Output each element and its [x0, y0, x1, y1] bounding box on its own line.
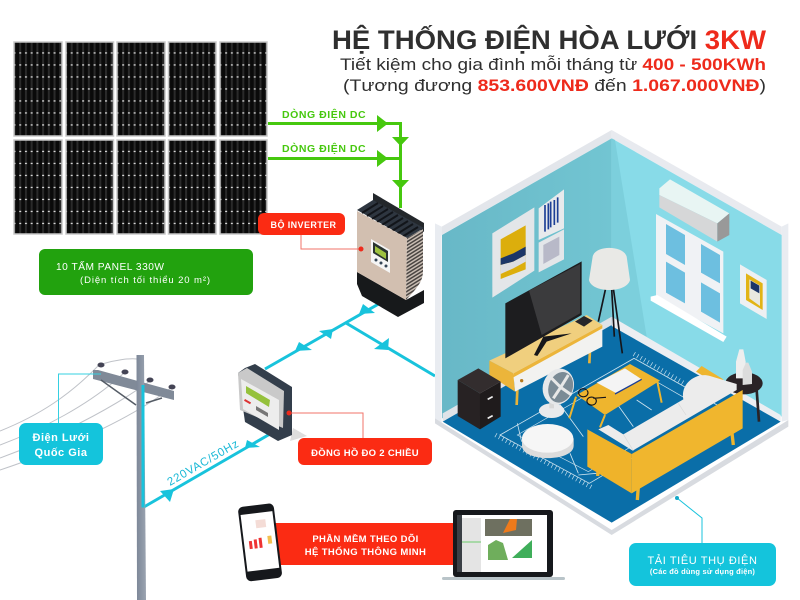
side table [725, 349, 763, 422]
voltage label: 220VAC/50Hz [166, 438, 241, 489]
lamp [589, 248, 630, 353]
panel caption: (Diện tích tối thiểu 20 m²) [80, 275, 211, 286]
software banner: HỆ THỐNG THÔNG MINH [305, 546, 426, 558]
software banner [275, 523, 455, 565]
sofa [587, 366, 743, 500]
DC wiring arrows: DÒNG ĐIỆN DC [282, 142, 366, 155]
inverter label [258, 213, 364, 252]
floor [435, 418, 788, 535]
room caption [629, 496, 776, 586]
room caption: TẢI TIÊU THỤ ĐIỆN [647, 554, 758, 567]
blue stripes art [539, 189, 564, 240]
grid label [19, 374, 103, 465]
panel caption: 10 TẤM PANEL 330W [56, 260, 165, 273]
tv [505, 261, 593, 358]
pouf [522, 424, 574, 458]
solar panels array [13, 41, 268, 236]
DC wiring arrows: DÒNG ĐIỆN DC [282, 108, 366, 121]
living room furniture [458, 261, 763, 500]
grid label: Quốc Gia [35, 447, 88, 459]
meter label [286, 410, 432, 465]
laptop [442, 510, 565, 580]
right wall [612, 138, 782, 417]
outer walls [435, 120, 788, 530]
inverter label: BỘ INVERTER [271, 219, 337, 230]
utility pole [0, 355, 176, 600]
title: HỆ THỐNG ĐIỆN HÒA LƯỚI 3KW [332, 23, 767, 55]
window [651, 214, 727, 342]
meter label: ĐỒNG HỒ ĐO 2 CHIỀU [311, 447, 419, 459]
software banner: PHẦN MỀM THEO DÕI [312, 534, 419, 545]
large wall art [492, 207, 534, 298]
AC wiring and arrows [143, 302, 435, 508]
left wall [442, 138, 612, 418]
subtitle: savings: Tiết kiệm cho gia đình mỗi tháng từ 400 - 500KWh [340, 55, 766, 74]
air conditioner [659, 179, 729, 242]
rug [496, 354, 720, 487]
room [435, 120, 788, 535]
DC wiring arrows [268, 108, 409, 208]
coffee table [569, 364, 662, 427]
panel caption [39, 249, 253, 295]
tv cabinet [489, 315, 602, 405]
inverter [357, 193, 424, 317]
grid label: Điện Lưới [33, 432, 89, 444]
subtitle: money equivalent: (Tương đương 853.600VNĐ đến 1.067.000VNĐ ) [343, 77, 766, 95]
electric meter [238, 364, 307, 441]
fan [538, 364, 579, 418]
phone [238, 503, 282, 582]
grey ornament art [539, 229, 564, 272]
storage boxes [458, 368, 501, 429]
small wall art [740, 264, 767, 319]
room caption: (Các đồ dùng sử dụng điện) [650, 567, 755, 576]
